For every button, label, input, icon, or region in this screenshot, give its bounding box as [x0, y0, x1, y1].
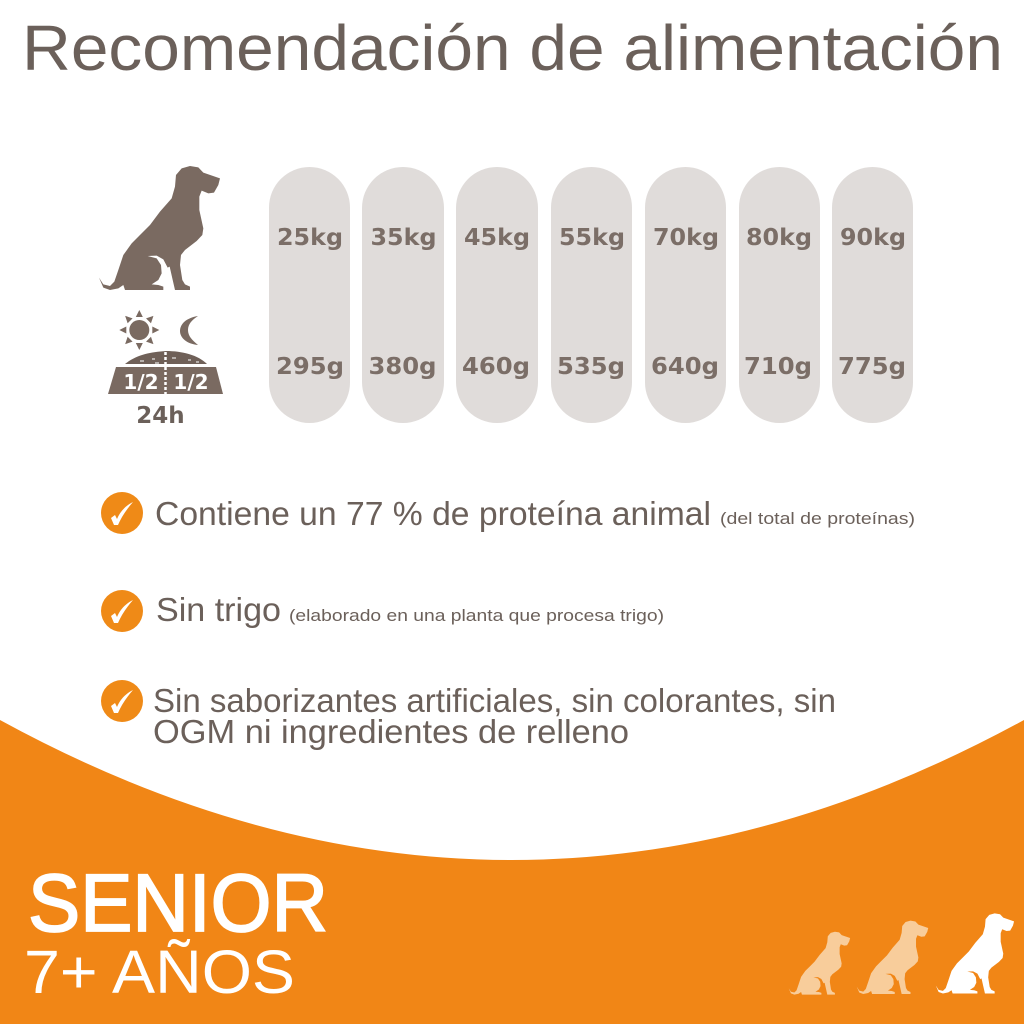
benefit: wheat free [101, 590, 664, 632]
icon: food bowl: 1/2 [173, 370, 209, 394]
icon: large white dog [936, 913, 1014, 994]
pill: 80kg 710g: 710g [744, 354, 812, 380]
icon: small dog [789, 932, 850, 995]
pill: 45kg 460g: 460g [462, 354, 530, 380]
pill: 80kg 710g [739, 167, 820, 423]
pill: 45kg 460g [456, 167, 538, 423]
pill: 90kg 775g [832, 167, 913, 423]
benefit: wheat free: (elaborado en una planta que procesa trigo) [289, 606, 664, 625]
orange footer band [0, 720, 1024, 1024]
pill: 25kg 295g: 295g [276, 354, 344, 380]
pill: 35kg 380g [362, 167, 444, 423]
benefit: no artificial additives: Sin saborizantes artificiales, sin colorantes, sin [153, 682, 836, 719]
pill: 90kg 775g: 775g [838, 354, 906, 380]
benefit: no artificial additives: OGM ni ingredientes de relleno [153, 713, 629, 750]
feeding table: weight and daily ration pills [269, 167, 913, 423]
icon: check [101, 492, 143, 534]
pill: 80kg 710g: 80kg [746, 225, 812, 251]
benefit: 77% animal protein [101, 492, 915, 534]
icon: medium dog [857, 921, 928, 994]
icon: check [101, 680, 143, 722]
icon: food bowl [108, 351, 223, 394]
label: 24h: 24h [136, 403, 185, 429]
pill: 70kg 640g [645, 167, 726, 423]
pill: 70kg 640g: 640g [651, 354, 719, 380]
pill: 35kg 380g: 35kg [370, 225, 436, 251]
title: Recomendación de alimentación [22, 12, 1003, 84]
pill: 55kg 535g [551, 167, 632, 423]
benefit: wheat free: Sin trigo [156, 591, 281, 628]
benefit: 77% animal protein: Contiene un 77 % de proteína animal [155, 495, 711, 532]
heading: SENIOR: SENIOR [28, 858, 328, 949]
pill: 55kg 535g: 55kg [559, 225, 625, 251]
pill: 55kg 535g: 535g [557, 354, 625, 380]
pill: 25kg 295g [269, 167, 350, 423]
pill: 90kg 775g: 90kg [840, 225, 906, 251]
icon: moon [180, 316, 198, 345]
pill: 45kg 460g: 45kg [464, 225, 530, 251]
subheading: 7+ AÑOS: 7+ AÑOS [24, 938, 295, 1006]
pill: 25kg 295g: 25kg [277, 225, 343, 251]
icon: sitting dog [99, 166, 220, 290]
benefit: no artificial additives [101, 680, 836, 750]
pill: 70kg 640g: 70kg [653, 225, 719, 251]
icon: check [101, 590, 143, 632]
benefit: 77% animal protein: (del total de proteínas) [720, 509, 915, 528]
icon: food bowl: 1/2 [123, 370, 159, 394]
pill: 35kg 380g: 380g [368, 354, 436, 380]
icon: feeding twice a day, half portions, 24h [108, 310, 223, 429]
icon: sun [119, 310, 159, 350]
